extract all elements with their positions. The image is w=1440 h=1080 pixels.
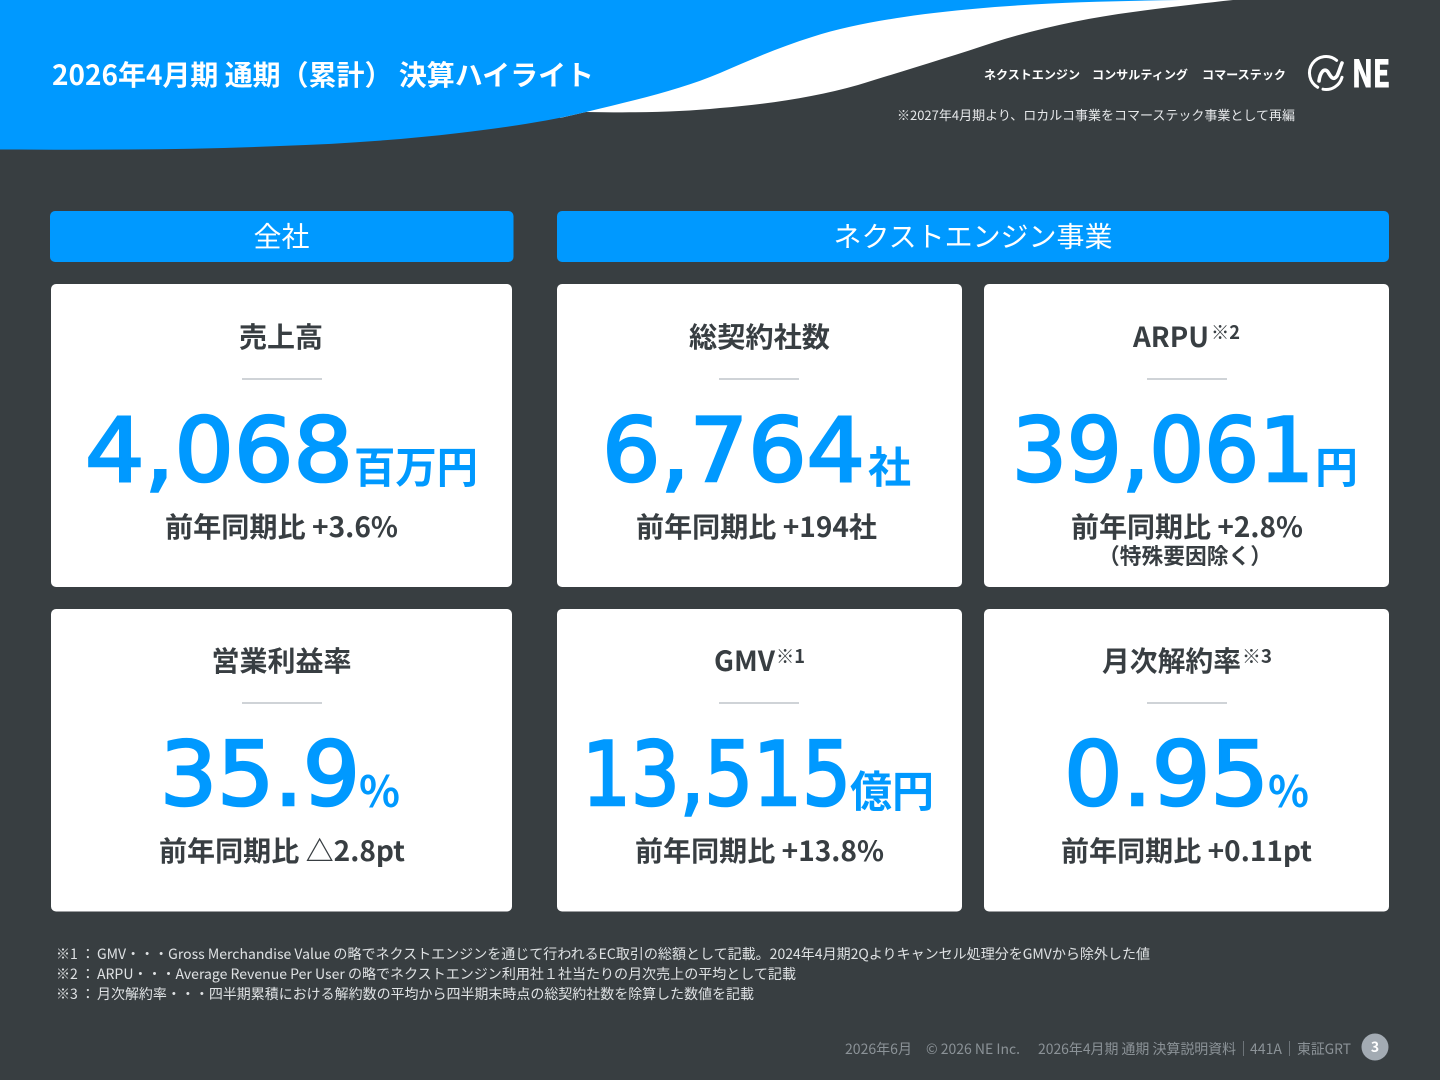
panel: GMV: GMV [714, 640, 776, 680]
panel: total contracted companies [557, 284, 962, 587]
panel: ARPU: 円 [1315, 434, 1358, 496]
logo: NE [1309, 44, 1390, 98]
panel: monthly churn rate: ※3 [1242, 642, 1272, 669]
panel: monthly churn rate: 0.95 [1064, 723, 1269, 826]
panel: monthly churn rate: % [1268, 758, 1309, 820]
panel: ARPU: ※2 [1211, 318, 1240, 345]
panel: monthly churn rate: 前年同期比 +0.11pt [1061, 830, 1312, 870]
panel: GMV: 億円 [850, 758, 934, 820]
panel: GMV: 13,515 [582, 723, 851, 826]
panel: GMV [557, 609, 962, 912]
business segments: コンサルティング [1092, 66, 1188, 83]
footnotes: ※3 ： [56, 984, 95, 1004]
footnotes: ※2 ： [56, 964, 95, 984]
panel: ARPU [984, 284, 1389, 587]
logo: NE: NE [1352, 44, 1390, 98]
footer: 441A [1250, 1039, 1282, 1059]
business segments: ネクストエンジン [984, 66, 1080, 83]
business segments: コマーステック [1202, 66, 1286, 83]
panel: revenue: 4,068 [85, 399, 353, 502]
panel: ARPU: 前年同期比 +2.8% [1071, 506, 1303, 546]
panel: revenue: 前年同期比 +3.6% [165, 506, 398, 546]
panel: GMV: 前年同期比 +13.8% [635, 830, 884, 870]
panel: ARPU: ARPU [1132, 316, 1209, 356]
reorganization note: ※2027年4月期より、ロカルコ事業をコマーステック事業として再編 [897, 105, 1295, 124]
section header: company-wide [50, 211, 514, 262]
section header: company-wide: 全社 [254, 216, 310, 256]
panel: ARPU: （特殊要因除く） [1098, 539, 1272, 571]
footer: © 2026 NE Inc. [926, 1039, 1020, 1059]
panel: GMV: ※1 [776, 642, 805, 669]
footnotes: 月次解約率・・・四半期累積における解約数の平均から四半期末時点の総契約社数を除算した数値を記載 [97, 984, 754, 1004]
panel: operating margin: % [359, 758, 400, 820]
footer: 東証GRT [1297, 1039, 1351, 1059]
panel: ARPU: 39,061 [1012, 399, 1314, 502]
footnotes: ※1 ： [56, 944, 95, 964]
panel: revenue: 百万円 [354, 434, 478, 496]
header blue wave [0, 0, 1180, 150]
section header: Next Engine business [557, 211, 1389, 262]
panel: operating margin: 35.9 [160, 723, 360, 826]
panel: revenue: 売上高 [239, 316, 323, 356]
panel: operating margin: 営業利益率 [212, 640, 352, 680]
footnotes [56, 944, 1150, 1004]
footer: 2026年6月 [845, 1039, 912, 1059]
panel: monthly churn rate: 月次解約率 [1102, 640, 1241, 680]
footnotes: ARPU・・・Average Revenue Per User の略でネクストエンジン利用社１社当たりの月次売上の平均として記載 [97, 964, 796, 984]
page number: 3 [1371, 1037, 1379, 1057]
panel: total contracted companies: 総契約社数 [689, 316, 830, 356]
panel: operating margin [51, 609, 512, 912]
panel: operating margin: 前年同期比 △2.8pt [159, 830, 405, 870]
panel: revenue [51, 284, 512, 587]
panel: monthly churn rate [984, 609, 1389, 912]
footer [845, 1039, 1351, 1059]
header white wave [560, 0, 1233, 118]
section header: Next Engine business: ネクストエンジン事業 [834, 216, 1112, 256]
footnotes: GMV・・・Gross Merchandise Value の略でネクストエンジンを通じて行われるEC取引の総額として記載。2024年4月期2Qよりキャンセル処理分をGMVから除外した値 [97, 944, 1150, 964]
title: 2026年4月期 通期（累計） 決算ハイライト [52, 54, 594, 94]
panel: total contracted companies: 前年同期比 +194社 [636, 506, 877, 546]
business segments [984, 66, 1286, 83]
page number [1362, 1034, 1388, 1060]
footer: 2026年4月期 通期 決算説明資料 [1038, 1039, 1236, 1059]
panel: total contracted companies: 社 [868, 434, 911, 496]
panel: total contracted companies: 6,764 [602, 399, 865, 502]
